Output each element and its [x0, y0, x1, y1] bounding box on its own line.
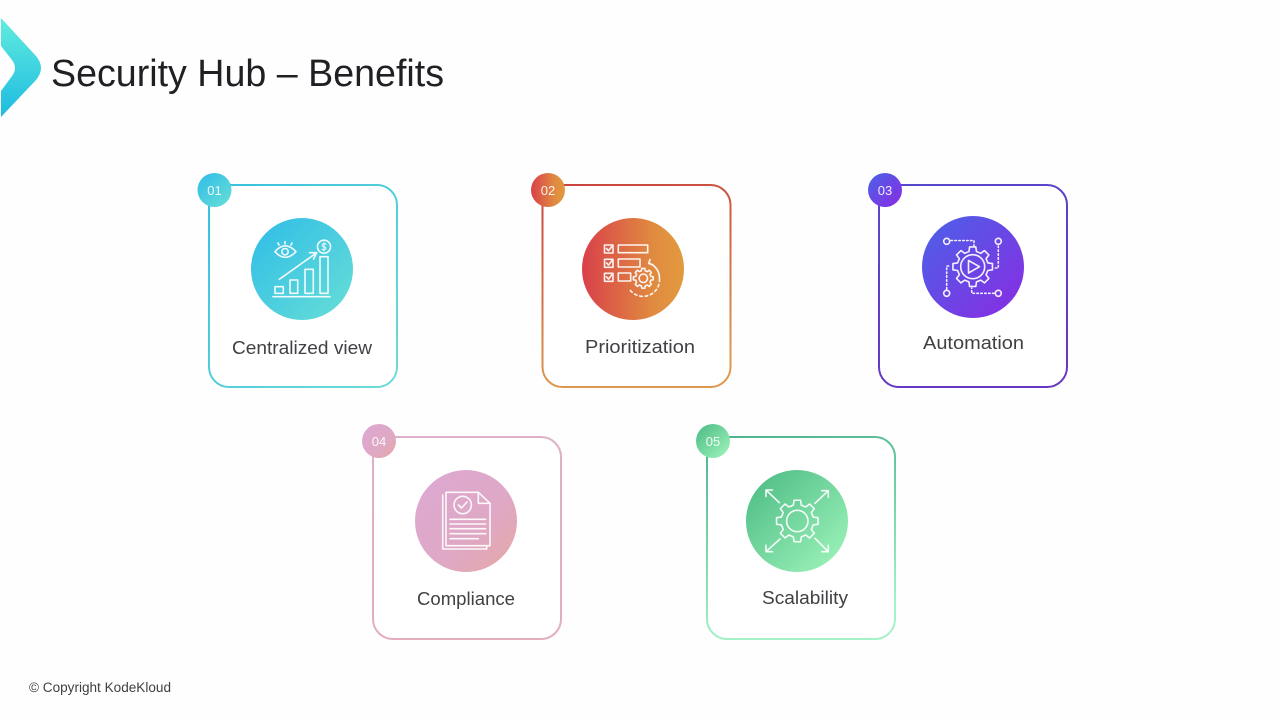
badge 03: 03	[878, 183, 892, 198]
icon disc: compliance document	[415, 470, 517, 572]
label: Scalability	[762, 587, 849, 608]
badge 01	[198, 173, 232, 207]
badge 04: 04	[372, 434, 386, 449]
badge 05: 05	[706, 434, 720, 449]
card 02 border	[542, 185, 730, 387]
card 05 border	[707, 437, 895, 639]
card 01: Centralized view	[198, 173, 397, 387]
logo chevron	[1, 18, 41, 117]
card 04: Compliance	[362, 424, 561, 639]
badge 02: 02	[541, 183, 555, 198]
badge 02	[531, 173, 565, 207]
badge 05	[696, 424, 730, 458]
badge 01: 01	[207, 183, 222, 198]
icon disc: gear with expanding arrows	[746, 470, 848, 572]
copyright footer: © Copyright KodeKloud	[29, 680, 171, 695]
card 03: Automation	[868, 173, 1067, 387]
card 04 border	[373, 437, 561, 639]
badge 03	[868, 173, 902, 207]
card 01 border	[209, 185, 397, 387]
icon disc: gear with play button	[922, 216, 1024, 318]
card 05: Scalability	[696, 424, 895, 639]
title: Security Hub – Benefits	[51, 53, 444, 95]
badge 04	[362, 424, 396, 458]
label: Prioritization	[585, 336, 695, 357]
label: Automation	[923, 332, 1024, 353]
label: Compliance	[417, 588, 515, 609]
label: Centralized view	[232, 337, 373, 358]
card 03 border	[879, 185, 1067, 387]
icon disc: checklist with gear	[582, 218, 684, 320]
icon disc: chart with eye and dollar	[251, 218, 353, 320]
card 02: Prioritization	[531, 173, 730, 387]
